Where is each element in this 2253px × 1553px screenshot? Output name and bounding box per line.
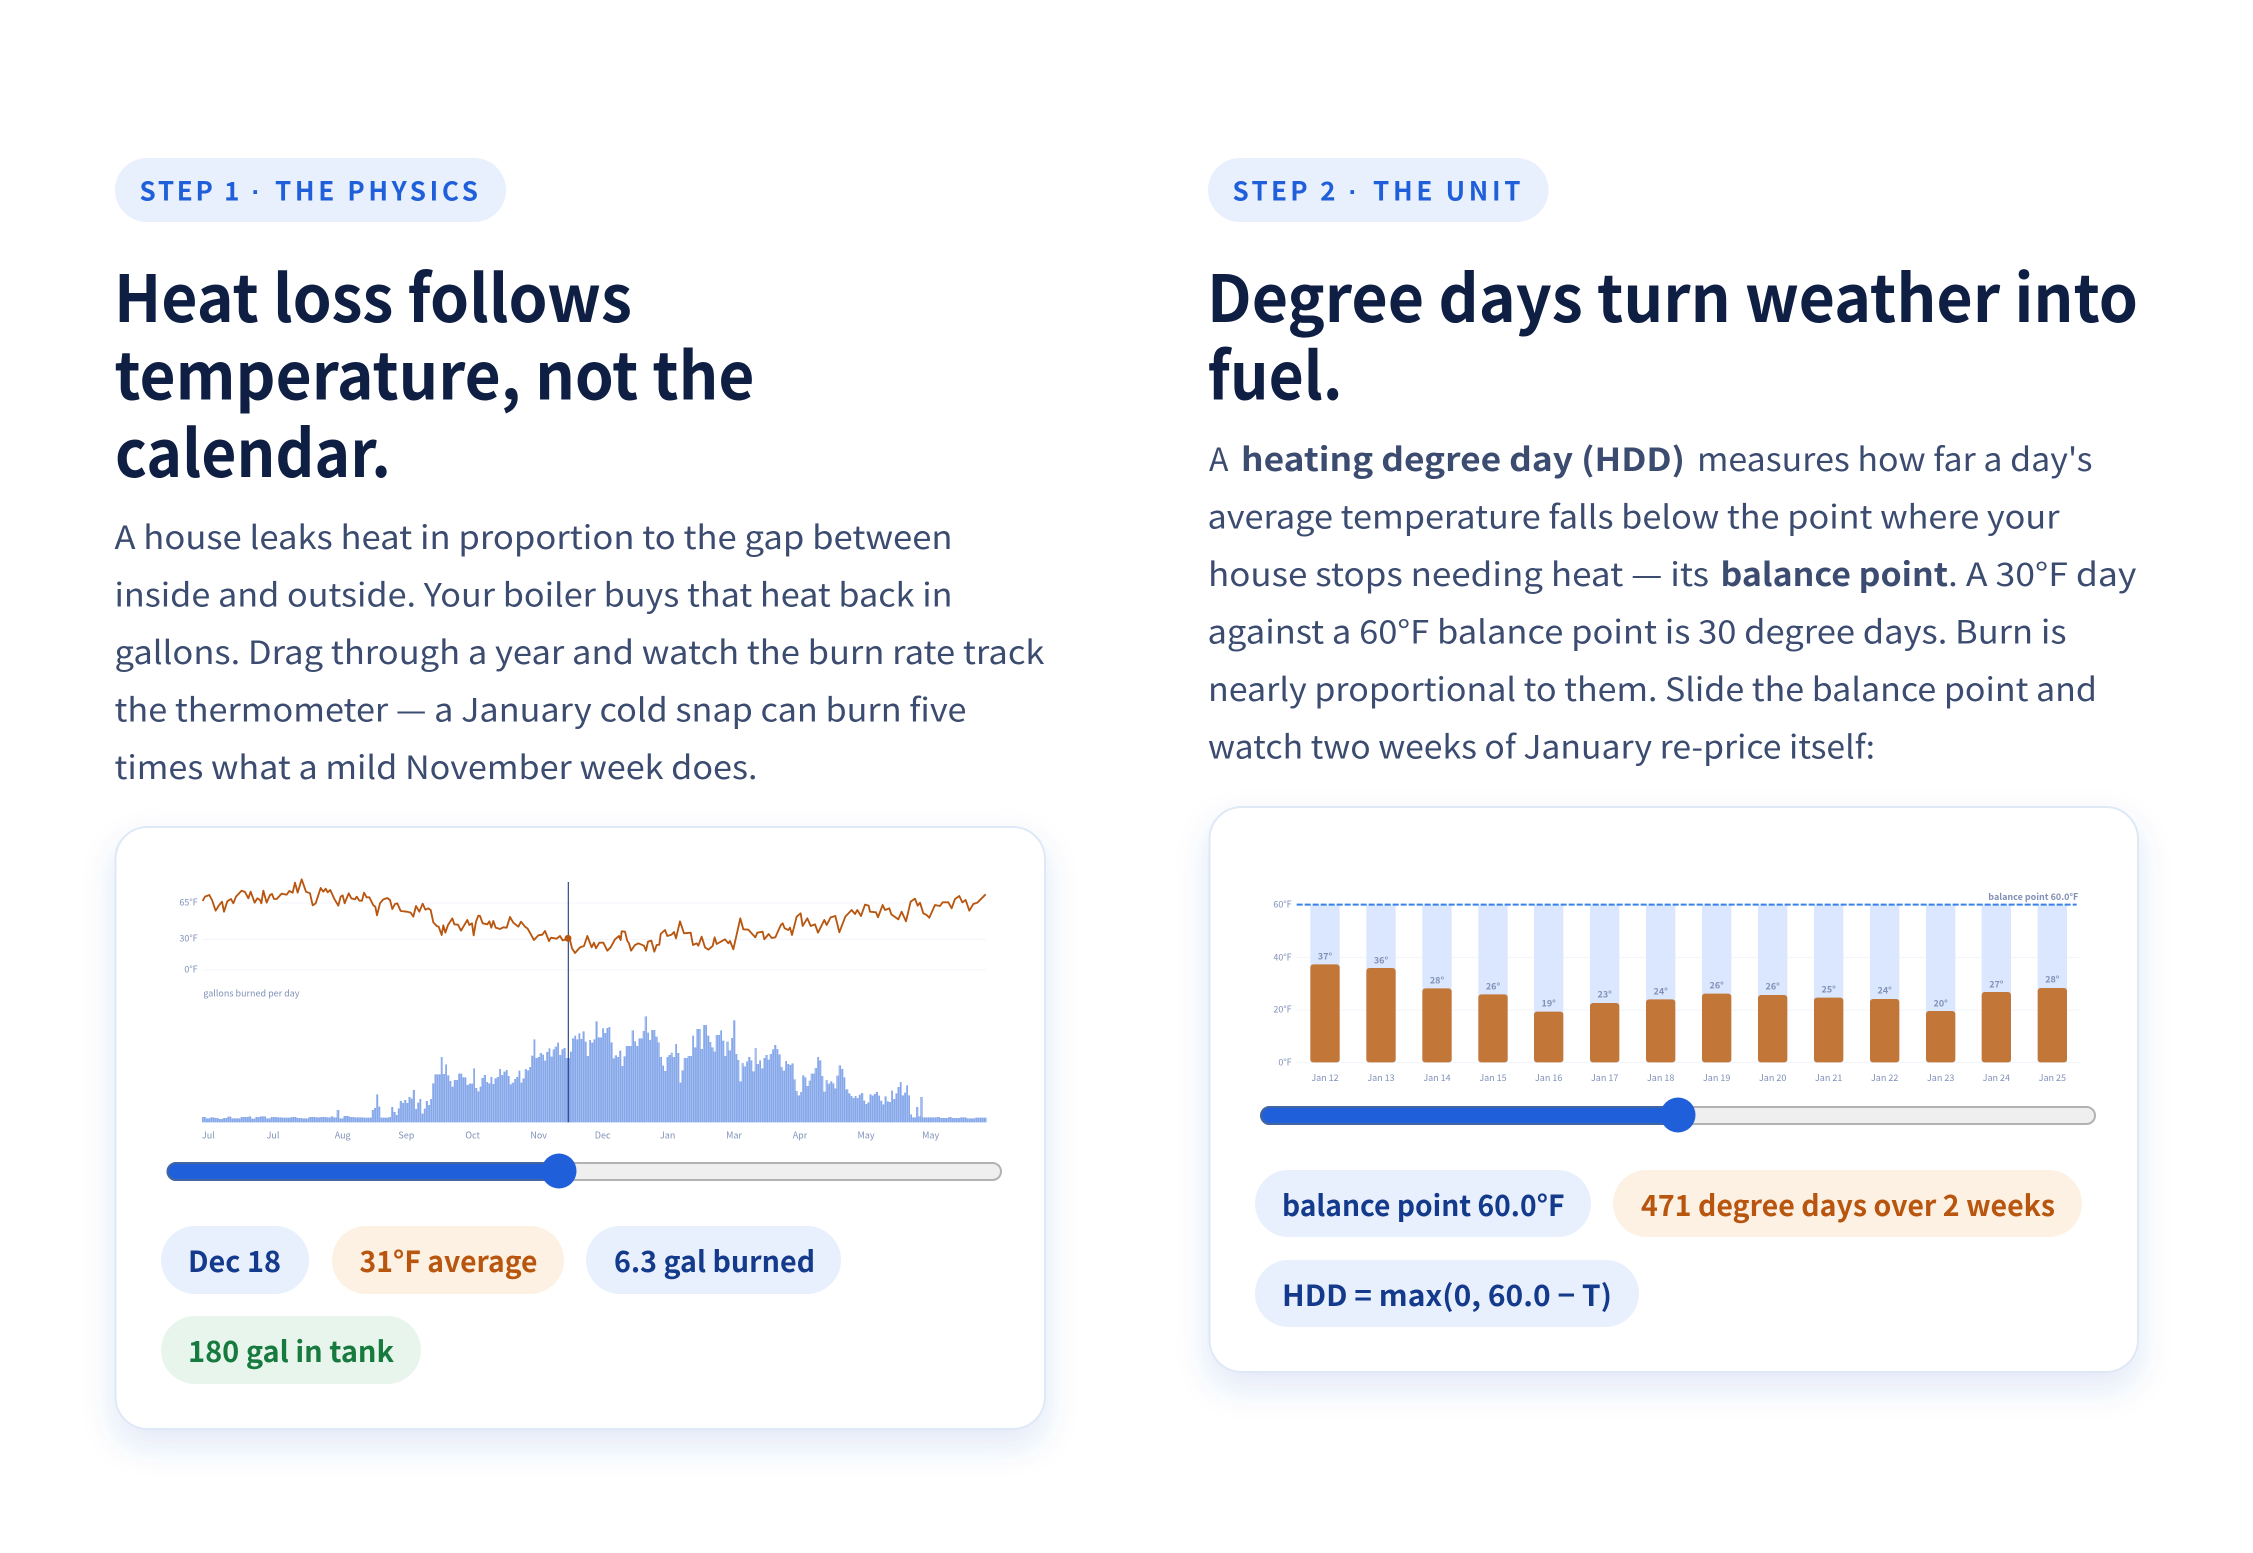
month axis labels: Sep	[398, 1129, 415, 1142]
temperature grid lines and axis labels	[179, 896, 986, 976]
date labels: Jan 25	[2039, 1071, 2066, 1084]
balance point line	[1297, 902, 2077, 908]
step 2 heading	[1207, 247, 2138, 418]
temperature line	[203, 879, 986, 953]
readout: date: Dec 18	[188, 1239, 281, 1281]
temperature value labels: 24°	[1654, 985, 1668, 998]
month axis labels: Apr	[793, 1129, 808, 1142]
temperature value labels: 25°	[1822, 982, 1836, 995]
temperature value labels: 28°	[1430, 974, 1444, 987]
step 2 heading: Degree days turn weather into	[1207, 247, 2138, 341]
temperature value labels: 36°	[1374, 954, 1388, 967]
month axis labels	[202, 1129, 939, 1142]
readout: gallons burned: 6.3 gal burned	[614, 1239, 815, 1281]
temperature value labels: 20°	[1934, 997, 1948, 1010]
month axis labels: Dec	[595, 1129, 611, 1142]
temperature value labels: 19°	[1542, 997, 1556, 1010]
readout: degree days total	[1613, 1170, 2082, 1237]
step 2 body text: heating degree day (HDD)	[1241, 435, 1685, 481]
step 1 body text: the thermometer — a January cold snap can burn five	[114, 686, 966, 732]
temperature value labels: 26°	[1710, 979, 1724, 992]
chart: daily temperature and gallons burned	[179, 879, 987, 1142]
temperature value labels: 24°	[1878, 984, 1892, 997]
step 2 body text: average temperature falls below the point where your	[1208, 492, 2060, 538]
temperature value labels: 37°	[1318, 950, 1332, 963]
panel: step 2 the unit	[1207, 158, 2138, 1372]
readout: gallons in tank	[161, 1316, 421, 1384]
date labels: Jan 13	[1367, 1071, 1395, 1084]
grid lines and axis labels: 60°F	[1273, 898, 1292, 911]
month axis labels: Aug	[335, 1129, 351, 1142]
step 2 body text: house stops needing heat — its	[1208, 550, 1709, 596]
date labels: Jan 22	[1871, 1071, 1898, 1084]
date labels: Jan 21	[1815, 1071, 1842, 1084]
date labels: Jan 18	[1647, 1071, 1674, 1084]
step 2 body text: nearly proportional to them. Slide the balance point and	[1208, 665, 2097, 711]
month axis labels: Jul	[202, 1129, 215, 1142]
date labels: Jan 24	[1983, 1071, 2010, 1084]
step 1 heading: calendar.	[115, 402, 391, 496]
step 1 heading: Heat loss follows	[114, 247, 632, 341]
step 1 heading	[114, 247, 754, 496]
panel: step 1 the physics	[114, 158, 1045, 1429]
date labels: Jan 15	[1479, 1071, 1507, 1084]
step 2 body text: balance point	[1720, 550, 1948, 596]
month axis labels: Nov	[530, 1129, 547, 1142]
temperature value labels: 26°	[1486, 980, 1500, 993]
step 1 badge	[115, 158, 506, 222]
readout: date	[161, 1226, 309, 1294]
temperature value labels: 23°	[1598, 988, 1612, 1001]
date labels: Jan 20	[1759, 1071, 1786, 1084]
readout: balance point: balance point 60.0°F	[1282, 1183, 1564, 1225]
step 1 badge: THE PHYSICS	[275, 172, 478, 208]
card: degree day chart	[1210, 807, 2138, 1372]
date labels: Jan 17	[1591, 1071, 1618, 1084]
grid lines and axis labels: 40°F	[1273, 951, 1292, 964]
month axis labels: Mar	[726, 1129, 742, 1142]
readout: formula	[1255, 1260, 1639, 1327]
balance point label: balance point 60.0°F	[1988, 890, 2078, 903]
readout: balance point	[1255, 1170, 1591, 1237]
date labels: Jan 23	[1927, 1071, 1954, 1084]
step 2 body text: A	[1209, 435, 1229, 481]
month axis labels: Oct	[465, 1129, 481, 1142]
balance point slider	[1261, 1098, 2095, 1132]
gallons bars	[202, 1016, 987, 1122]
step 1 heading: temperature, not the	[114, 324, 754, 418]
step 2 body text: against a 60°F balance point is 30 degree days. Burn is	[1208, 608, 2066, 654]
card: temperature and burn chart	[116, 827, 1045, 1429]
current day marker	[564, 882, 571, 1122]
date labels: Jan 16	[1535, 1071, 1562, 1084]
readout: degree days total: 471 degree days over 2 weeks	[1641, 1183, 2055, 1225]
step 1 body text: gallons. Drag through a year and watch the burn rate track	[114, 628, 1045, 674]
temperature bars	[1310, 964, 2067, 1062]
month axis labels: Jul	[267, 1129, 280, 1142]
step 2 badge: ·	[1349, 176, 1357, 206]
date labels: Jan 14	[1423, 1071, 1451, 1084]
step 1 body text: A house leaks heat in proportion to the gap between	[114, 513, 952, 559]
step 2 badge	[1208, 158, 1548, 222]
step 2 heading: fuel.	[1208, 324, 1342, 418]
step 1 body text: inside and outside. Your boiler buys that heat back in	[114, 570, 952, 616]
step 2 body text: . A 30°F day	[1948, 550, 2137, 596]
readout: average temperature: 31°F average	[360, 1239, 538, 1281]
step 2 badge: STEP 2	[1232, 172, 1336, 208]
month axis labels: May	[922, 1129, 939, 1142]
step 1 body text: times what a mild November week does.	[114, 743, 758, 789]
temperature grid lines and axis labels: 65°F	[179, 896, 198, 909]
date labels: Jan 19	[1703, 1071, 1730, 1084]
readout: gallons in tank: 180 gal in tank	[188, 1329, 394, 1371]
balance gap bars	[1310, 905, 2067, 1062]
chart: January temperatures against balance point	[1273, 890, 2080, 1084]
temperature value labels: 27°	[1989, 978, 2004, 991]
step 1 badge: ·	[252, 176, 260, 206]
readout: average temperature	[332, 1226, 564, 1294]
step 1 badge: STEP 1	[140, 172, 240, 208]
gallons label: gallons burned per day	[203, 987, 300, 1000]
date labels	[1311, 1071, 2066, 1084]
temperature value labels	[1318, 950, 2060, 1010]
step 2 badge: THE UNIT	[1373, 172, 1520, 208]
step 2 body text: measures how far a day's	[1697, 435, 2092, 481]
temperature grid lines and axis labels: 30°F	[179, 932, 198, 945]
step 2 body text: watch two weeks of January re-price itself:	[1208, 722, 1875, 768]
step 1 body text	[114, 513, 1045, 789]
date labels: Jan 12	[1311, 1071, 1339, 1084]
date slider	[168, 1154, 1001, 1188]
readout: gallons burned	[586, 1226, 841, 1294]
grid lines and axis labels	[1273, 898, 2080, 1069]
step 2 body text	[1208, 435, 2137, 768]
readout: formula: HDD = max(0, 60.0 − T)	[1282, 1273, 1612, 1315]
temperature value labels: 26°	[1766, 980, 1780, 993]
temperature value labels: 28°	[2045, 973, 2060, 986]
temperature grid lines and axis labels: 0°F	[184, 963, 198, 976]
grid lines and axis labels: 0°F	[1278, 1056, 1292, 1069]
grid lines and axis labels: 20°F	[1273, 1003, 1292, 1016]
month axis labels: Jan	[660, 1129, 675, 1142]
month axis labels: May	[857, 1129, 875, 1142]
